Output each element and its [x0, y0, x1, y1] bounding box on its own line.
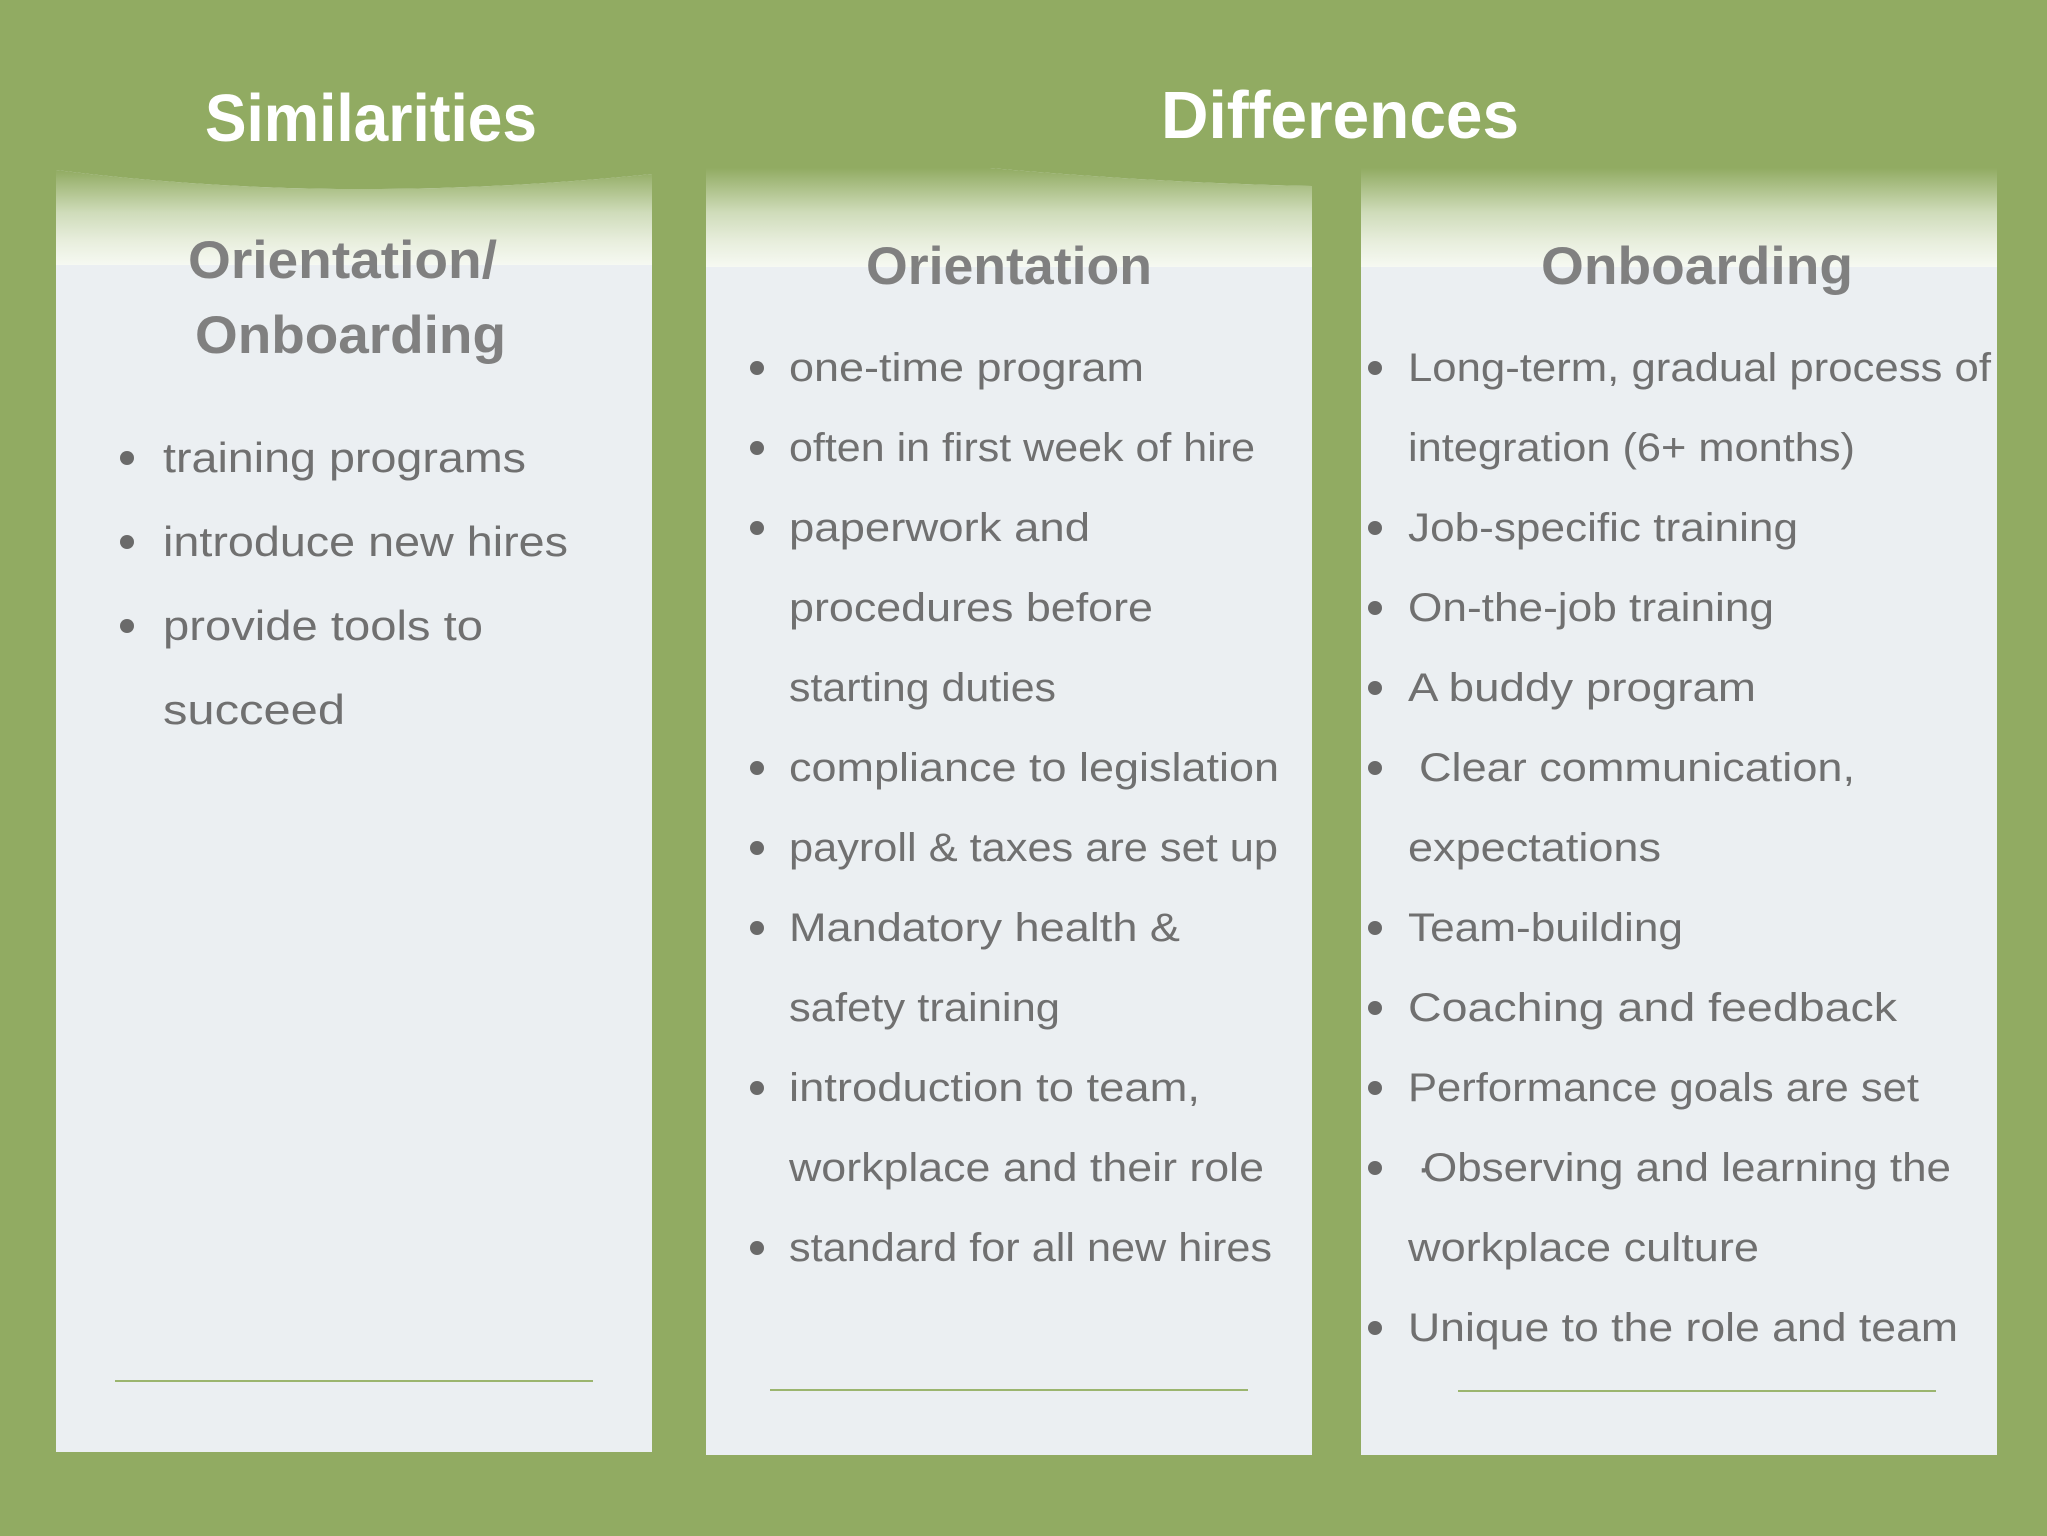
bullet list: similarities: training programs	[163, 434, 526, 481]
bullet list: orientation: workplace and their role	[788, 1146, 1264, 1190]
subheading: Orientation/ Onboarding: Onboarding	[195, 306, 506, 365]
bullet list: onboarding: Team-building	[1408, 906, 1683, 950]
bullet list: onboarding: Long-term, gradual process of	[1408, 346, 1992, 390]
bullet list: onboarding: Clear communication,	[1419, 746, 1855, 790]
bullet list: onboarding: Unique to the role and team	[1408, 1306, 1958, 1350]
heading: Similarities: Similarities	[205, 81, 537, 156]
bullet list: onboarding	[1368, 346, 1992, 1350]
panel: similarities	[56, 170, 652, 1452]
bullet list: onboarding: expectations	[1408, 826, 1661, 870]
bullet list: onboarding: Observing and learning the	[1423, 1146, 1951, 1190]
bullet list: onboarding: ·	[1417, 1146, 1430, 1190]
panel top fade	[56, 170, 652, 265]
heading: Differences: Differences	[1161, 78, 1519, 153]
panel: orientation	[706, 168, 1312, 1455]
panel body	[1361, 168, 1997, 1455]
bullet list: onboarding: integration (6+ months)	[1408, 426, 1855, 470]
bullet list: onboarding: workplace culture	[1407, 1226, 1759, 1270]
bullet list: onboarding: On-the-job training	[1408, 586, 1774, 630]
bullet list: similarities: introduce new hires	[163, 518, 568, 565]
bullet list: similarities	[120, 434, 568, 733]
bullet list: orientation: introduction to team,	[789, 1066, 1200, 1110]
subheading: Orientation/ Onboarding	[188, 231, 506, 365]
bullet list: orientation: one-time program	[789, 346, 1144, 390]
bullet list: similarities: provide tools to	[163, 602, 483, 649]
panel body	[706, 168, 1312, 1455]
bullet list: similarities: succeed	[163, 686, 345, 733]
bullet list: onboarding: A buddy program	[1408, 666, 1756, 710]
panel top fade	[1361, 168, 1997, 267]
panel: onboarding	[1361, 168, 1997, 1455]
bullet list: orientation: often in first week of hire	[789, 426, 1255, 470]
bullet list: onboarding: Coaching and feedback	[1408, 986, 1898, 1030]
bullet list: orientation: safety training	[789, 986, 1060, 1030]
bullet list: orientation: standard for all new hires	[789, 1226, 1272, 1270]
bullet list: orientation	[750, 346, 1279, 1270]
bullet list: onboarding: Performance goals are set	[1408, 1066, 1919, 1110]
bullet list: orientation: procedures before	[789, 586, 1153, 630]
subheading: Orientation/ Onboarding: Orientation/	[188, 231, 497, 290]
bullet list: orientation: Mandatory health &	[789, 906, 1180, 950]
bullet list: orientation: compliance to legislation	[789, 746, 1279, 790]
bullet list: onboarding: Job-specific training	[1408, 506, 1798, 550]
subheading: Orientation: Orientation	[866, 237, 1152, 296]
panel body	[56, 170, 652, 1452]
bullet list: orientation: paperwork and	[789, 506, 1090, 550]
subheading: Onboarding: Onboarding	[1541, 237, 1853, 296]
bullet list: orientation: payroll & taxes are set up	[789, 826, 1278, 870]
bullet list: orientation: starting duties	[789, 666, 1056, 710]
panel top fade	[706, 168, 1312, 267]
